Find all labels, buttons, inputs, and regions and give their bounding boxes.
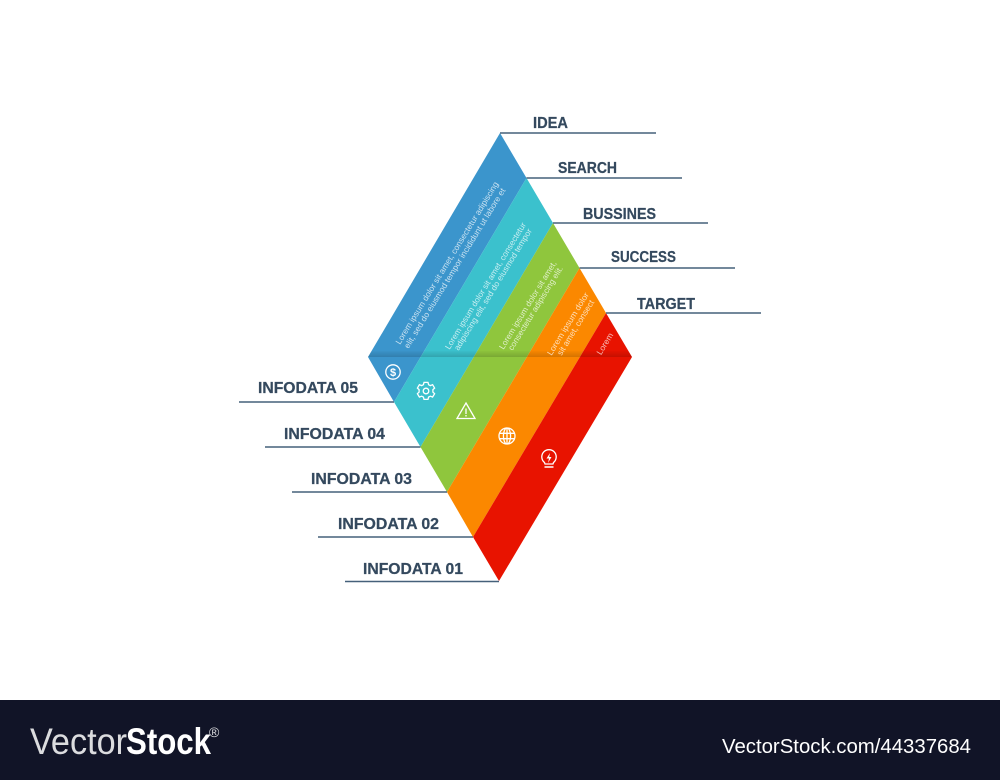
text: orange band: Lorem ipsum dolor — [545, 290, 591, 357]
label: SUCCESS: SUCCESS — [611, 249, 676, 266]
icon: warning triangle — [457, 403, 475, 418]
label: IDEA: IDEA — [533, 115, 568, 132]
footer image id: VectorStock.com/44337684 — [722, 736, 971, 758]
icon: gear — [417, 382, 435, 399]
band: blue — [368, 133, 526, 402]
footer logo — [30, 721, 220, 762]
text: cyan band: Lorem ipsum dolor sit amet, consectetur — [443, 220, 528, 351]
text: red band: Lorem — [594, 331, 615, 357]
footer logo: ® — [209, 724, 220, 740]
text: blue band: elit, sed do eiusmod tempor incididunt ut labore et — [402, 186, 508, 350]
band: green — [420, 223, 580, 492]
footer bar — [0, 700, 1000, 780]
label: SEARCH: SEARCH — [558, 160, 617, 177]
band: red — [473, 313, 632, 581]
icon: dollar coin — [386, 365, 400, 379]
text: green band: consectetur adipiscing elit. — [506, 264, 565, 352]
icon: globe — [499, 428, 515, 444]
rhombus diagram — [368, 133, 632, 581]
icon: dollar coin: $ — [390, 367, 396, 379]
label: INFODATA 05: INFODATA 05 — [258, 380, 358, 397]
label: BUSSINES: BUSSINES — [583, 206, 656, 223]
footer logo: Stock — [126, 721, 211, 762]
fold shadow — [368, 351, 632, 357]
label: TARGET: TARGET — [637, 296, 695, 313]
band: orange — [447, 268, 606, 537]
text: green band: Lorem ipsum dolor sit amet, — [497, 259, 559, 351]
text: cyan band: adipiscing elit, sed do eiusmod tempor — [452, 226, 534, 352]
label: INFODATA 03: INFODATA 03 — [311, 471, 412, 488]
band: cyan — [394, 178, 553, 447]
label: INFODATA 01: INFODATA 01 — [363, 561, 463, 578]
text: orange band: sit amet, consect — [555, 298, 596, 357]
text: blue band: Lorem ipsum dolor sit amet, consectetur adipiscing — [393, 179, 501, 346]
icon: light bulb — [542, 450, 556, 467]
label: INFODATA 02: INFODATA 02 — [338, 516, 439, 533]
label: INFODATA 04: INFODATA 04 — [284, 426, 385, 443]
footer logo: Vector — [30, 721, 127, 762]
